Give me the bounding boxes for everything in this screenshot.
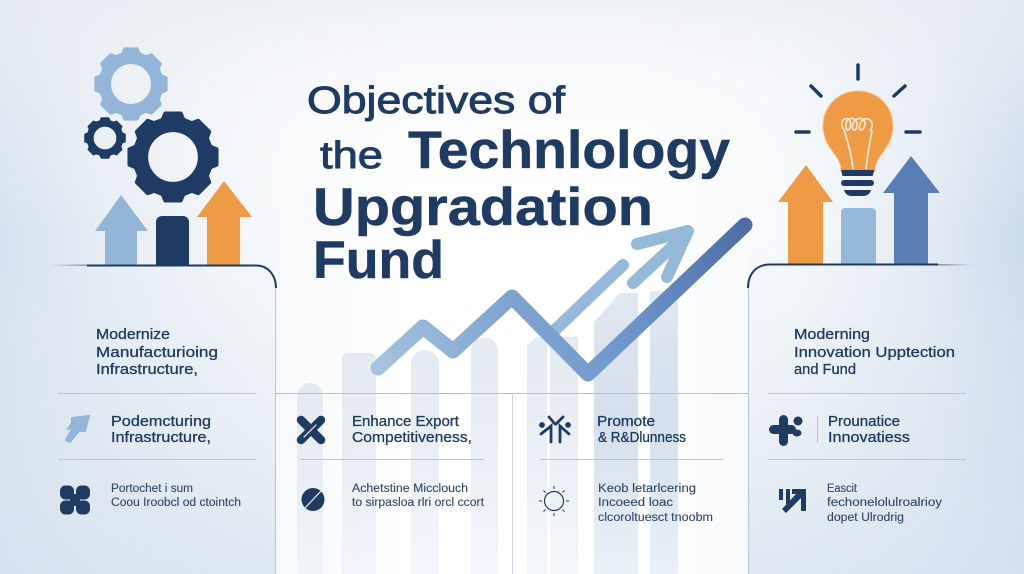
text: Coou Iroobcl od ctointch [111,497,241,509]
title [307,80,731,290]
right panel: row 1 [769,413,910,446]
text [111,483,241,509]
text: Portochet i sum [111,483,193,495]
left arrows and bar [95,181,252,265]
icon: slashed circle [302,488,324,511]
filament [842,118,872,169]
right panel: heading text: Moderning [794,326,870,343]
title: the [320,135,383,177]
title: Objectives of [307,80,566,122]
faded bar chart [297,291,678,574]
text: & R&Dlunness [598,429,686,446]
text [827,483,942,524]
text: Enhance Export [352,413,460,430]
right panel: heading text: Innovation Upptection [794,344,955,361]
left panel: row 1 [66,413,211,446]
right panel top rule [748,264,973,288]
left panel: heading text: Infrastructure, [96,361,198,378]
title: Fund [313,231,444,290]
light blue bar [841,208,876,264]
icon: sun [539,486,569,516]
bulb glass [823,91,893,171]
text [828,413,910,446]
text: Incoeed loac [598,497,673,509]
icon: gears [85,49,217,201]
text: fechonelolulroalrioy [827,497,942,509]
text: to sirpasloa rlri orcl ccort [352,497,485,509]
light blue arrow [95,195,148,265]
light secondary arrow [555,231,688,330]
icon: plus with dots [769,415,802,446]
text [111,413,211,446]
rays [796,65,920,132]
left panel: heading text: Manufacturioing [96,344,218,361]
centre-right panel: row 1 [540,413,686,446]
large dark gear [129,113,217,201]
text [352,413,472,446]
text: Innovatiess [828,429,910,446]
icon: arrow [66,416,89,442]
text: Podemcturing [111,413,211,430]
text [597,413,686,446]
orange arrow [778,165,833,264]
icon: spark figure [540,417,570,442]
text: clcoroltuesct tnoobm [598,512,713,524]
text: Eascit [827,483,858,495]
centre-right panel: row 2 [539,483,713,524]
right panel: row 2 [779,483,942,524]
dark bar [156,216,189,265]
light gear [96,49,166,119]
right panel: heading text: and Fund [794,361,856,378]
text [352,483,485,509]
orange arrow [197,181,252,265]
left panel: row 2 [60,483,241,514]
text: dopet Ulrodrig [827,512,904,524]
text: Promote [597,413,655,430]
small dark gear [85,118,125,158]
text: Prounatice [828,413,900,430]
icon: crossed bars [301,420,321,440]
text: Keob letarlcering [598,483,696,495]
left panel top rule [50,264,276,288]
title: Upgradation [313,178,653,237]
text: Infrastructure, [111,429,211,446]
trend line [378,225,745,374]
text [598,483,713,524]
middle panel: row 2 [302,483,485,511]
left panel: heading text: Modernize [96,326,170,343]
bulb base [841,170,874,196]
icon: four-lobed knot [60,486,90,514]
panel grid lines [58,288,966,574]
left panel: heading text [96,326,218,378]
icon: light bulb [796,65,920,196]
text: Achetstine Micclouch [352,483,468,495]
icon: arrow with bars [779,489,806,513]
text: Competitiveness, [352,429,472,446]
middle panel: row 1 [301,413,472,446]
right panel: heading text [794,326,955,378]
right arrows and bar [778,156,940,264]
title: Technlology [408,121,731,180]
blue arrow [883,156,940,264]
